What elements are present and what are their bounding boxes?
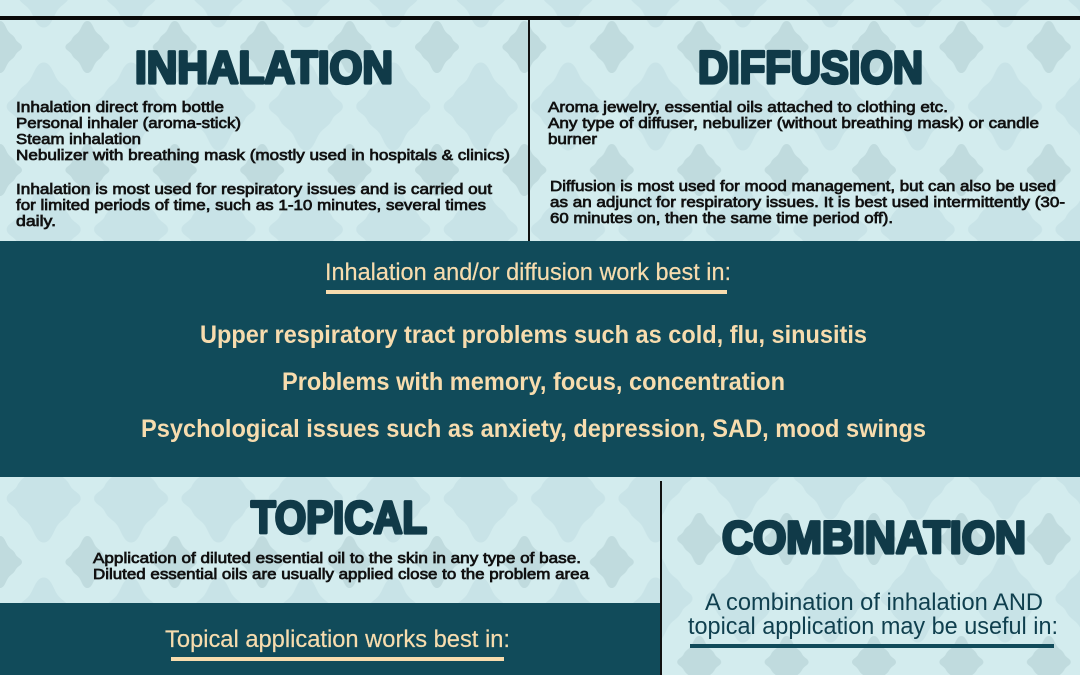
text: diffusion usage: 60 minutes on, then the same time period off).: [550, 211, 893, 227]
subheading: inhalation and diffusion: Inhalation and/or diffusion work best in:: [325, 259, 731, 286]
top divider: [0, 16, 1080, 20]
text: inhalation methods: Steam inhalation: [16, 132, 141, 148]
vertical divider: bottom panels: [660, 481, 662, 675]
list: best uses: [141, 321, 926, 443]
text: combination description: topical application may be useful in:: [688, 613, 1058, 640]
heading: combination: COMBINATION: [722, 512, 1026, 563]
text: inhalation methods: Inhalation direct from bottle: [16, 100, 224, 116]
panel: diffusion: [548, 42, 1065, 227]
text: topical description: Diluted essential oils are usually applied close to the problem area: [93, 567, 590, 583]
text: topical description: Application of diluted essential oil to the skin in any type of base.: [93, 551, 581, 567]
vertical divider: top panels: [528, 20, 530, 241]
list: best uses: Psychological issues such as anxiety, depression, SAD, mood swings: [141, 415, 926, 443]
panel: topical: [0, 477, 660, 603]
subheading: topical application: Topical application works best in:: [165, 626, 510, 653]
text: topical description: [93, 551, 590, 583]
heading: topical: TOPICAL: [251, 492, 427, 543]
text: inhalation usage: daily.: [16, 214, 56, 230]
text: diffusion usage: Diffusion is most used for mood management, but can also be used: [550, 179, 1056, 195]
text: diffusion methods: Any type of diffuser, nebulizer (without breathing mask) or candle: [548, 116, 1039, 132]
text: inhalation methods: [16, 100, 510, 164]
text: combination description: [688, 589, 1058, 640]
panel: inhalation: [16, 42, 510, 230]
text: combination description: A combination of inhalation AND: [705, 589, 1043, 616]
text: diffusion methods: burner: [548, 132, 597, 148]
heading: diffusion: DIFFUSION: [698, 42, 923, 93]
list: best uses: Problems with memory, focus, concentration: [282, 368, 785, 396]
text: inhalation usage: [16, 182, 492, 230]
text: inhalation usage: for limited periods of time, such as 1-10 minutes, several times: [16, 198, 486, 214]
text: diffusion methods: Aroma jewelry, essential oils attached to clothing etc.: [548, 100, 948, 116]
text: diffusion methods: [548, 100, 1039, 148]
text: inhalation methods: Personal inhaler (aroma-stick): [16, 116, 241, 132]
list: best uses: Upper respiratory tract problems such as cold, flu, sinusitis: [200, 321, 867, 349]
text: inhalation usage: Inhalation is most used for respiratory issues and is carried out: [16, 182, 492, 198]
panel: inhalation and diffusion best uses: [0, 241, 1080, 477]
text: diffusion usage: [550, 179, 1065, 227]
text: diffusion usage: as an adjunct for respiratory issues. It is best used intermittently (30-: [550, 195, 1065, 211]
panel: topical best uses: [0, 603, 660, 675]
text: inhalation methods: Nebulizer with breathing mask (mostly used in hospitals & clinics): [16, 148, 510, 164]
panel: combination: [688, 512, 1058, 648]
heading: inhalation: INHALATION: [135, 42, 393, 93]
